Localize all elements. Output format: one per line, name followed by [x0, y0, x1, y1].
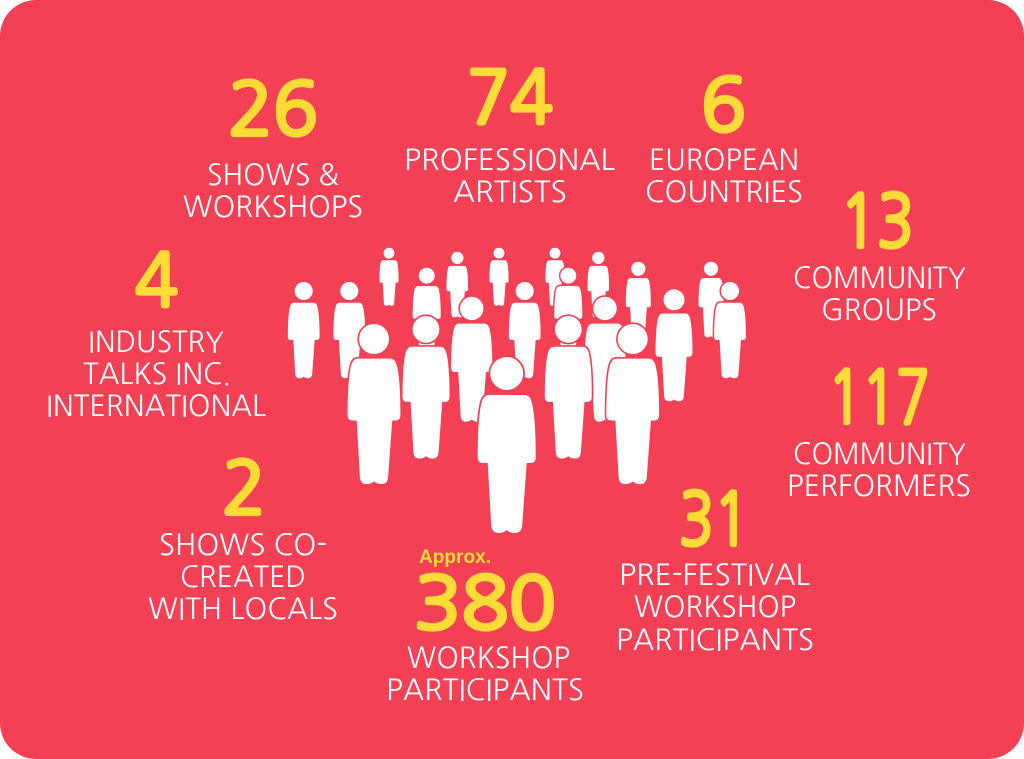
stat: 31 pre-festival workshop participants: WORKSHOP — [634, 593, 796, 622]
stat: 74 professional artists — [404, 62, 615, 207]
stat: 26 shows and workshops: 26 — [228, 74, 318, 146]
stat: 4 industry talks: TALKS INC. — [83, 360, 231, 389]
stat: 13 community groups: GROUPS — [821, 296, 937, 325]
stat: 117 community performers: COMMUNITY — [793, 440, 966, 469]
stat: 117 community performers: PERFORMERS — [787, 472, 971, 501]
stat: 31 pre-festival workshop participants — [616, 484, 814, 655]
stat: 31 pre-festival workshop participants: PRE-FESTIVAL — [619, 561, 810, 590]
stat: approx 380 workshop participants: Approx. — [419, 547, 491, 568]
stat: 26 shows and workshops: WORKSHOPS — [183, 193, 363, 222]
stat: 2 shows co-created with locals: WITH LOCALS — [148, 595, 338, 624]
stat: 4 industry talks: 4 — [135, 245, 178, 317]
stat: 2 shows co-created with locals: 2 — [222, 453, 266, 525]
stat: 2 shows co-created with locals: CREATED — [180, 563, 306, 592]
stat: approx 380 workshop participants — [386, 547, 584, 705]
stat: 26 shows and workshops — [183, 74, 363, 222]
stat: 74 professional artists: PROFESSIONAL — [404, 146, 615, 175]
stat: approx 380 workshop participants: PARTICIPANTS — [386, 676, 584, 705]
stat: 117 community performers: 117 — [828, 362, 930, 434]
stat: 6 European countries: COUNTRIES — [645, 178, 803, 207]
stat: 4 industry talks — [46, 245, 266, 421]
stat: 26 shows and workshops: SHOWS & — [207, 161, 339, 190]
stat: 2 shows co-created with locals: SHOWS CO- — [159, 531, 327, 560]
stat: 6 European countries: EUROPEAN — [649, 146, 799, 175]
stat: 4 industry talks: INDUSTRY — [88, 328, 224, 357]
stat: 13 community groups: 13 — [840, 186, 914, 258]
stat: approx 380 workshop participants: WORKSHOP — [407, 644, 570, 673]
stat: 31 pre-festival workshop participants: PARTICIPANTS — [616, 626, 814, 655]
stat: 74 professional artists: ARTISTS — [453, 178, 567, 207]
stat: 6 European countries — [645, 70, 803, 207]
stat: approx 380 workshop participants: 380 — [414, 568, 556, 640]
stat: 4 industry talks: INTERNATIONAL — [46, 392, 266, 421]
stat: 6 European countries: 6 — [701, 70, 746, 142]
stat: 31 pre-festival workshop participants: 31 — [679, 484, 749, 556]
stat: 13 community groups: COMMUNITY — [793, 264, 966, 293]
stat: 2 shows co-created with locals — [148, 453, 338, 624]
stat: 117 community performers — [787, 362, 971, 501]
stat: 13 community groups — [793, 186, 966, 325]
stat: 74 professional artists: 74 — [467, 62, 553, 134]
icon: crowd of people — [288, 248, 746, 533]
